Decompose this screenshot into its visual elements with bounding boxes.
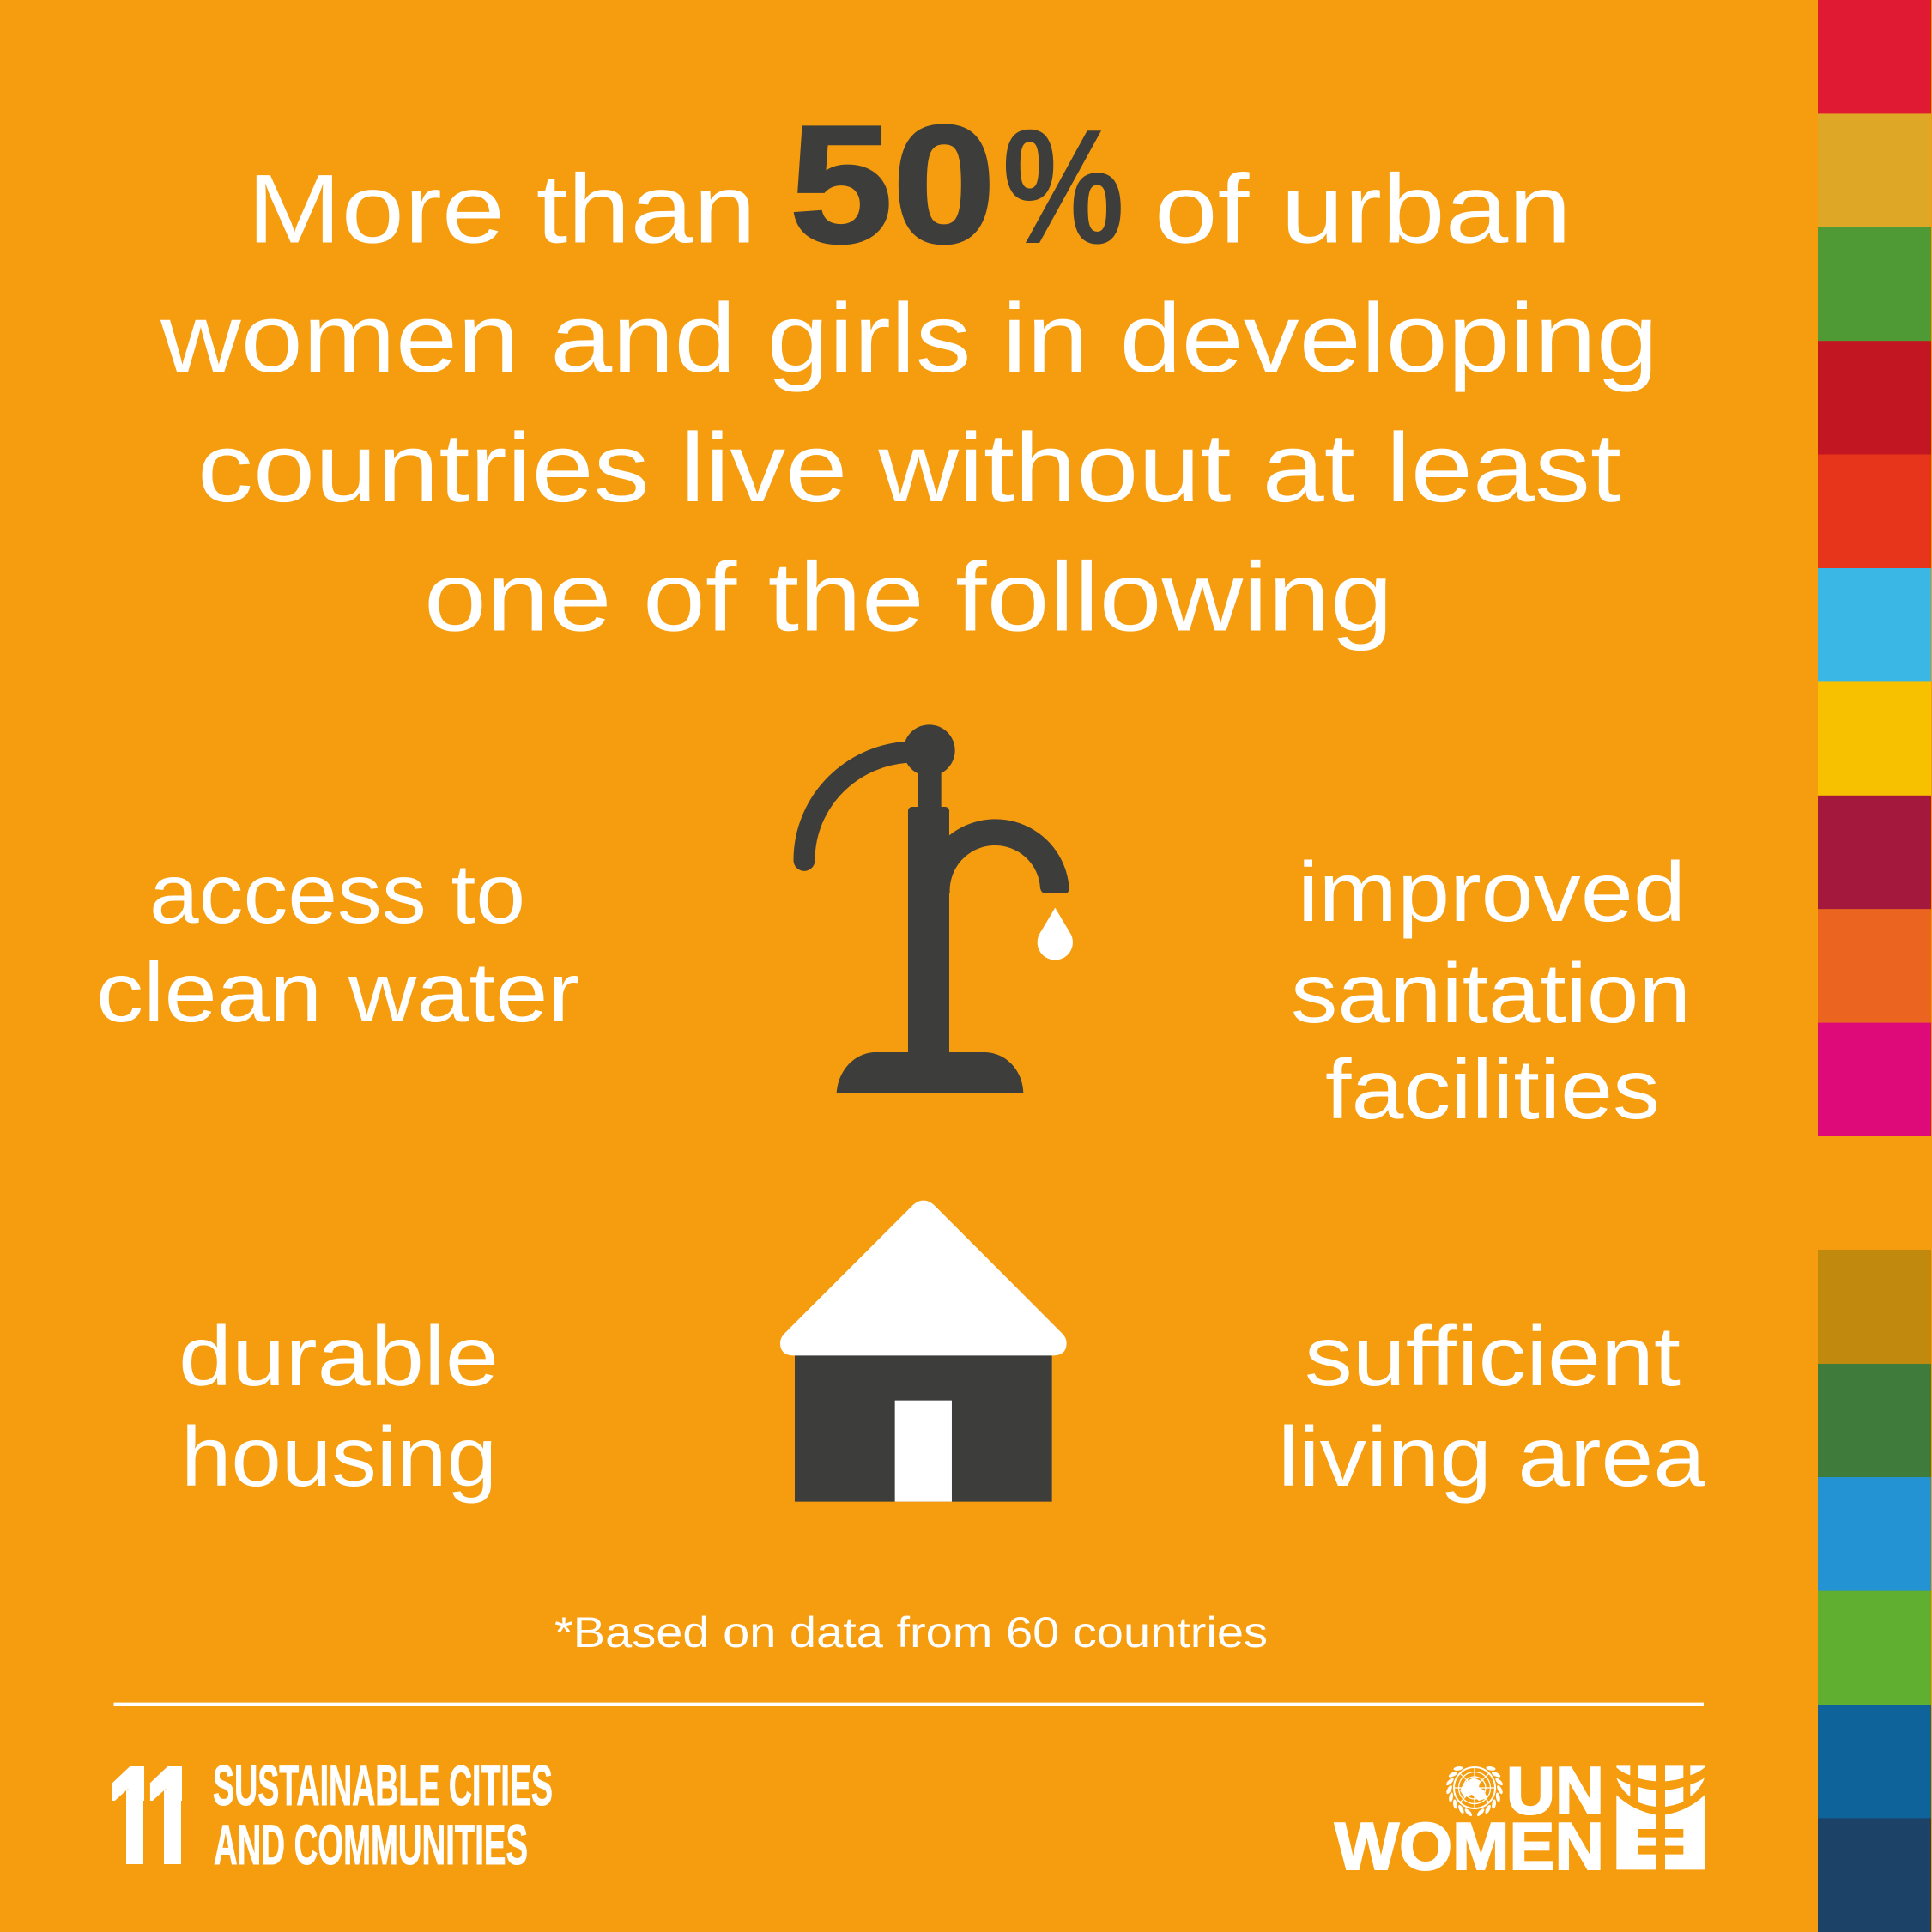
- goal number: 1: [107, 1739, 160, 1894]
- statistic: 50%: [790, 91, 1124, 278]
- icon: UN emblem: [1445, 1765, 1504, 1817]
- goal name line 1: SUSTAINABLE CITIES: [213, 1753, 553, 1817]
- text block: improved sanitation facilities: facilities: [1325, 1042, 1660, 1136]
- title line 2: women and girls in developing: [160, 284, 1658, 393]
- goal number: 1: [145, 1739, 198, 1894]
- text block: durable housing: durable: [179, 1309, 499, 1403]
- icon: UN Women symbol: [1616, 1765, 1705, 1869]
- title: [160, 91, 1658, 652]
- logo wordmark WOMEN: WOMEN: [1335, 1808, 1604, 1884]
- icon: water pump: [804, 724, 1073, 1093]
- text block: improved sanitation facilities: [1291, 845, 1691, 1136]
- goal number: [112, 1766, 182, 1864]
- logo wordmark UN: UN: [1506, 1753, 1604, 1828]
- statistic: 50%: 50: [790, 91, 996, 278]
- goal name line 2: AND COMMUNITIES: [214, 1813, 528, 1876]
- title line 3: countries live without at least: [197, 414, 1621, 523]
- UN Women logo: [1335, 1753, 1705, 1884]
- text block: sufficient living area: [1278, 1309, 1706, 1504]
- text block: access to clean water: [96, 846, 579, 1039]
- text block: durable housing: [179, 1309, 499, 1504]
- text block: improved sanitation facilities: sanitation: [1291, 946, 1691, 1040]
- text block: access to clean water: clean water: [96, 945, 579, 1039]
- title line 4: one of the following: [424, 542, 1393, 652]
- text block: sufficient living area: sufficient: [1305, 1309, 1681, 1403]
- title line 1 start: More than: [247, 154, 756, 264]
- text block: sufficient living area: living area: [1278, 1409, 1706, 1504]
- icon: house: [780, 1201, 1067, 1502]
- footnote: *Based on data from 60 countries: [554, 1608, 1268, 1656]
- text block: improved sanitation facilities: improved: [1298, 845, 1686, 939]
- panel: SDG colour stripes: [1818, 0, 1931, 1932]
- statistic: 50%: %: [1002, 96, 1124, 278]
- text block: durable housing: housing: [181, 1409, 497, 1504]
- title line 1 end: of urban: [1154, 154, 1572, 264]
- text block: access to clean water: access to: [149, 846, 525, 941]
- SDG 11 label: [112, 1765, 552, 1865]
